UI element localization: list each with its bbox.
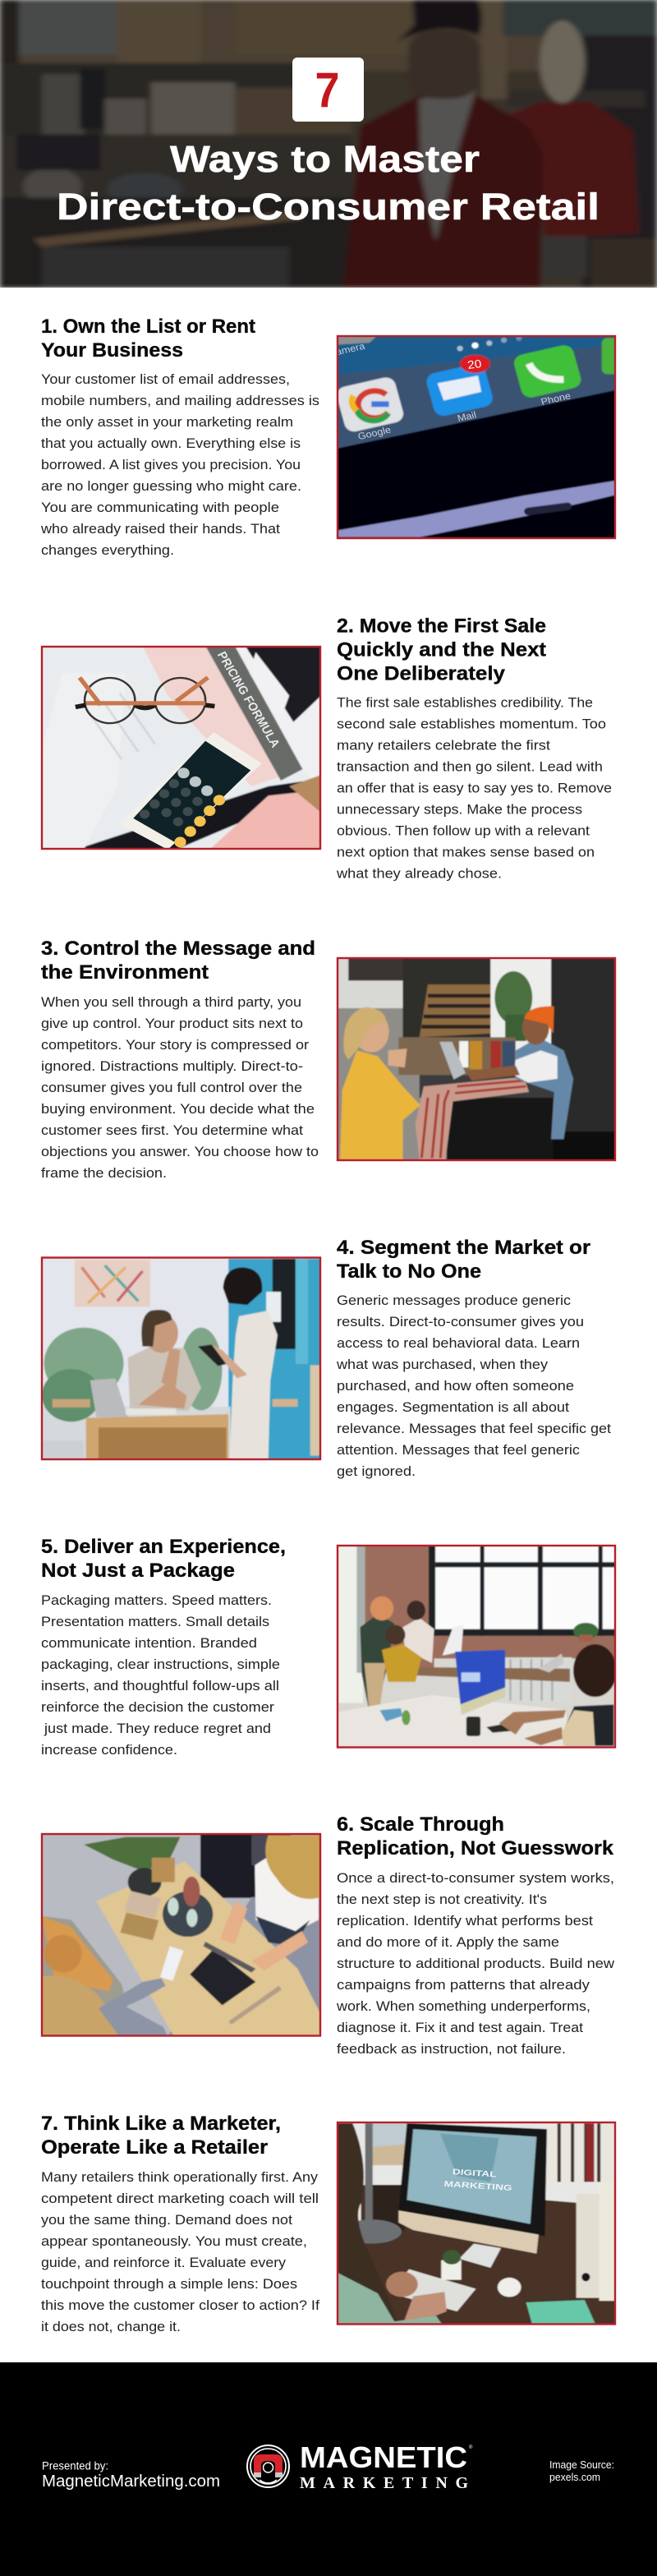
heading 2 — [337, 615, 546, 685]
body text 6: Once a direct-to-consumer system works, — [337, 1871, 614, 1886]
heading 5: Not Just a Package — [41, 1560, 235, 1582]
body text 5: communicate intention. Branded — [41, 1636, 257, 1651]
body text 5 — [41, 1593, 280, 1758]
header number badge — [292, 58, 364, 122]
heading 7 — [41, 2113, 281, 2159]
body text 3: objections you answer. You choose how to — [41, 1145, 319, 1159]
photo: glasses, calculator phone and pricing formula paper — [41, 646, 321, 850]
body text 3: competitors. Your story is compressed or — [41, 1038, 310, 1053]
body text 1: that you actually own. Everything else is — [41, 436, 301, 451]
body text 7 — [41, 2170, 319, 2334]
body text 7: you the same thing. Demand does not — [41, 2213, 292, 2228]
body text 4: relevance. Messages that feel specific get — [337, 1422, 611, 1436]
body text 2: next option that makes sense based on — [337, 845, 595, 859]
heading 1 — [41, 316, 255, 362]
body text 3: When you sell through a third party, you — [41, 995, 301, 1010]
heading 2: 2. Move the First Sale — [337, 615, 546, 638]
body text 4: results. Direct-to-consumer gives you — [337, 1315, 584, 1329]
body text 4: what was purchased, when they — [336, 1357, 549, 1372]
body text 2: many retailers celebrate the first — [337, 738, 550, 753]
photo: smartphone home screen icons: amera — [334, 340, 366, 357]
body text 4: attention. Messages that feel generic — [337, 1443, 580, 1458]
photo: smartphone home screen icons: Google — [356, 424, 393, 442]
title — [57, 138, 600, 228]
body text 5: increase confidence. — [41, 1743, 177, 1758]
section 3 — [41, 938, 616, 1181]
body text 6: structure to additional products. Build new — [337, 1956, 614, 1971]
image source credit: pexels.com — [549, 2471, 600, 2483]
body text 5: just made. They reduce regret and — [44, 1721, 271, 1736]
title: Ways to Master — [170, 138, 480, 180]
body text 1: are no longer guessing who might care. — [41, 479, 301, 494]
body text 7: this move the customer closer to action? If — [41, 2298, 319, 2313]
presented by credit: MagneticMarketing.com — [42, 2472, 220, 2491]
section 1 — [40, 316, 623, 558]
body text 7: it does not, change it. — [41, 2320, 181, 2334]
logo: magnet in concentric rings — [247, 2445, 289, 2487]
section 6 — [41, 1813, 614, 2057]
heading 6 — [337, 1813, 613, 1859]
body text 7: appear spontaneously. You must create, — [41, 2234, 307, 2249]
logo wordmark: ® — [469, 2445, 473, 2450]
heading 3: 3. Control the Message and — [41, 938, 315, 960]
body text 6: work. When something underperforms, — [336, 1999, 590, 2014]
heading 3 — [41, 938, 315, 984]
body text 7: touchpoint through a simple lens: Does — [41, 2277, 297, 2292]
logo wordmark: MARKETING — [300, 2474, 468, 2492]
body text 1: who already raised their hands. That — [40, 522, 280, 537]
heading 7: 7. Think Like a Marketer, — [41, 2113, 281, 2135]
body text 2 — [336, 695, 612, 881]
body text 2: The first sale establishes credibility. The — [337, 695, 593, 710]
photo: overhead view of people working at a wooden table — [41, 1833, 321, 2036]
photo: person working at a desktop showing digital marketing: MARKETING — [443, 2179, 512, 2193]
body text 3 — [41, 995, 319, 1181]
presented by credit — [42, 2458, 220, 2491]
section 4 — [41, 1237, 611, 1479]
body text 4 — [336, 1293, 611, 1479]
section 7 — [41, 2113, 616, 2334]
body text 7: competent direct marketing coach will tell — [41, 2191, 319, 2206]
title: Direct-to-Consumer Retail — [57, 186, 600, 228]
body text 2: second sale establishes momentum. Too — [337, 717, 606, 731]
body text 4: access to real behavioral data. Learn — [337, 1336, 580, 1351]
body text 1: changes everything. — [41, 543, 174, 558]
body text 2: obvious. Then follow up with a relevant — [337, 823, 590, 838]
heading 6: Replication, Not Guesswork — [337, 1837, 613, 1859]
body text 7: guide, and reinforce it. Evaluate every — [41, 2256, 287, 2270]
heading 4: Talk to No One — [337, 1260, 481, 1283]
photo: man and woman talking at a wooden desk — [41, 1257, 321, 1460]
photo: person working at a desktop showing digital marketing — [337, 2122, 616, 2325]
body text 2: what they already chose. — [336, 866, 502, 881]
body text 6: diagnose it. Fix it and test again. Treat — [337, 2021, 583, 2035]
photo: woman and shopkeeper at a clothing store counter — [337, 957, 616, 1162]
body text 3: customer sees first. You determine what — [41, 1123, 303, 1138]
body text 4: Generic messages produce generic — [337, 1293, 571, 1308]
header number badge: 7 — [315, 62, 340, 118]
photo: smartphone home screen icons: 20 — [466, 358, 482, 372]
heading 7: Operate Like a Retailer — [41, 2136, 268, 2159]
body text 5: Packaging matters. Speed matters. — [41, 1593, 272, 1608]
body text 7: Many retailers think operationally first. Any — [41, 2170, 319, 2185]
section 5 — [41, 1536, 617, 1758]
body text 4: purchased, and how often someone — [337, 1379, 574, 1394]
body text 1: Your customer list of email addresses, — [41, 372, 290, 387]
body text 2: transaction and then go silent. Lead with — [337, 759, 603, 774]
body text 3: consumer gives you full control over the — [41, 1081, 302, 1095]
heading 2: Quickly and the Next — [337, 639, 546, 661]
footer — [0, 2362, 657, 2576]
body text 1: You are communicating with people — [41, 500, 279, 515]
body text 6: feedback as instruction, not failure. — [337, 2042, 566, 2057]
heading 6: 6. Scale Through — [337, 1813, 504, 1836]
body text 6: replication. Identify what performs best — [337, 1914, 593, 1929]
photo: glasses, calculator phone and pricing formula paper: PRICING FORMULA — [214, 650, 283, 750]
body text 4: get ignored. — [337, 1464, 416, 1479]
image source credit — [549, 2458, 614, 2483]
heading 4 — [337, 1237, 590, 1283]
heading 4: 4. Segment the Market or — [337, 1237, 590, 1259]
photo: person working at a desktop showing digital marketing: DIGITAL — [452, 2167, 497, 2179]
presented by credit: Presented by: — [42, 2458, 108, 2472]
logo wordmark — [300, 2440, 473, 2492]
heading 5 — [41, 1536, 286, 1582]
heading 2: One Deliberately — [337, 662, 505, 685]
body text 6: campaigns from patterns that already — [337, 1978, 590, 1993]
body text 6: and do more of it. Apply the same — [337, 1935, 559, 1950]
body text 1 — [40, 372, 319, 558]
body text 1: mobile numbers, and mailing addresses is — [41, 394, 319, 408]
body text 3: frame the decision. — [41, 1166, 167, 1181]
heading 1: Your Business — [41, 339, 183, 362]
heading 1: 1. Own the List or Rent — [41, 316, 255, 338]
heading 5: 5. Deliver an Experience, — [41, 1536, 286, 1558]
body text 1: borrowed. A list gives you precision. You — [41, 458, 301, 472]
body text 1: the only asset in your marketing realm — [41, 415, 293, 430]
body text 5: packaging, clear instructions, simple — [41, 1657, 280, 1672]
body text 3: ignored. Distractions multiply. Direct-to- — [41, 1059, 303, 1074]
body text 5: Presentation matters. Small details — [41, 1615, 269, 1629]
section 2 — [41, 615, 612, 881]
body text 5: reinforce the decision the customer — [41, 1700, 275, 1715]
body text 2: unnecessary steps. Make the process — [337, 802, 582, 817]
image source credit: Image Source: — [549, 2458, 614, 2471]
body text 5: inserts, and thoughtful follow-ups all — [41, 1679, 279, 1694]
body text 6: the next step is not creativity. It's — [337, 1892, 547, 1907]
body text 3: buying environment. You decide what the — [41, 1102, 315, 1117]
photo: coworkers at computers in a bright office — [337, 1545, 617, 1749]
heading 3: the Environment — [41, 961, 209, 984]
body text 4: engages. Segmentation is all about — [337, 1400, 569, 1415]
photo: smartphone home screen icons — [334, 335, 623, 539]
photo: smartphone home screen icons: Phone — [540, 390, 572, 408]
body text 3: give up control. Your product sits next to — [41, 1016, 303, 1031]
header background photo: clothing store with mannequins — [0, 0, 657, 288]
body text 6 — [336, 1871, 614, 2057]
header banner — [0, 0, 657, 288]
body text 2: an offer that is easy to say yes to. Remove — [337, 781, 612, 795]
logo wordmark: MAGNETIC — [300, 2440, 467, 2474]
photo: smartphone home screen icons: Mail — [456, 409, 477, 424]
